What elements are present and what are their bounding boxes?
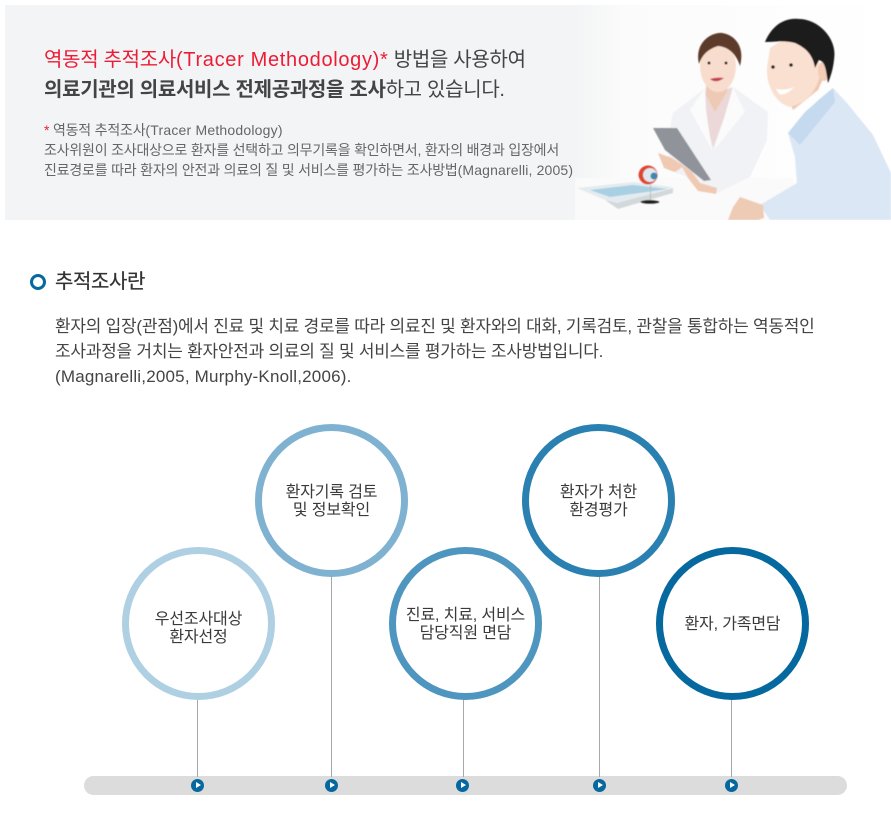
tablet [653, 128, 711, 181]
step circle 1: 우선조사대상 [155, 610, 242, 628]
booklets [577, 182, 673, 209]
timeline marker 3 [456, 779, 469, 792]
timeline marker 2 [325, 779, 338, 792]
step circle 3: 담당직원 면담 [420, 625, 511, 642]
section heading [30, 271, 145, 293]
timeline marker 4 [593, 779, 606, 792]
timeline marker 1 [191, 779, 204, 792]
icon: ring bullet [30, 274, 46, 290]
step circle 5: 환자, 가족면담 [684, 616, 780, 633]
banner headline [44, 49, 526, 101]
step circle 5 [656, 547, 809, 700]
banner headline: 역동적 추적조사(Tracer Methodology)* 방법을 사용하여 [44, 49, 526, 71]
table [575, 178, 800, 220]
banner footnote: 진료경로를 따라 환자의 안전과 의료의 질 및 서비스를 평가하는 조사방법(Magnarelli, 2005) [44, 162, 573, 178]
step circle 3: 진료, 치료, 서비스 [406, 606, 525, 624]
step circle 1: 환자선정 [169, 629, 228, 646]
step circle 4: 환자가 처한 [560, 484, 637, 500]
timeline marker 5 [725, 779, 738, 792]
banner footnote: * 역동적 추적조사(Tracer Methodology) [44, 122, 283, 138]
banner footnote: 조사위원이 조사대상으로 환자를 선택하고 의무기록을 확인하면서, 환자의 배경과 입장에서 [44, 142, 559, 158]
banner photo: doctor and patient [580, 5, 891, 220]
heading text: 추적조사란 [55, 271, 145, 293]
banner headline: 의료기관의 의료서비스 전제공과정을 조사하고 있습니다. [44, 79, 505, 101]
timeline bar [84, 776, 847, 795]
section description: (Magnarelli,2005, Murphy-Knoll,2006). [55, 367, 352, 386]
step circle 4 [522, 424, 675, 577]
patient [728, 19, 891, 220]
banner panel [5, 5, 891, 220]
step circle 2: 및 정보확인 [293, 502, 370, 519]
step circle 3 [389, 547, 542, 700]
doctor [653, 33, 768, 194]
timeline [84, 776, 847, 795]
connector line 5 [731, 699, 732, 777]
section description [55, 317, 815, 386]
step circle 2 [255, 424, 408, 577]
connector line 2 [331, 576, 332, 777]
step circle 4: 환경평가 [569, 502, 628, 519]
banner footnote [44, 122, 573, 178]
section description: 환자의 입장(관점)에서 진료 및 치료 경로를 따라 의료진 및 환자와의 대화, 기록검토, 관찰을 통합하는 역동적인 [55, 317, 815, 336]
hands [658, 153, 684, 172]
connector line 1 [197, 699, 198, 777]
step circle 1 [122, 547, 275, 700]
eye model [638, 166, 660, 204]
connector line 4 [599, 576, 600, 777]
step circle 2: 환자기록 검토 [286, 484, 377, 500]
connector line 3 [463, 699, 464, 777]
section description: 조사과정을 거치는 환자안전과 의료의 질 및 서비스를 평가하는 조사방법입니다. [55, 342, 603, 361]
